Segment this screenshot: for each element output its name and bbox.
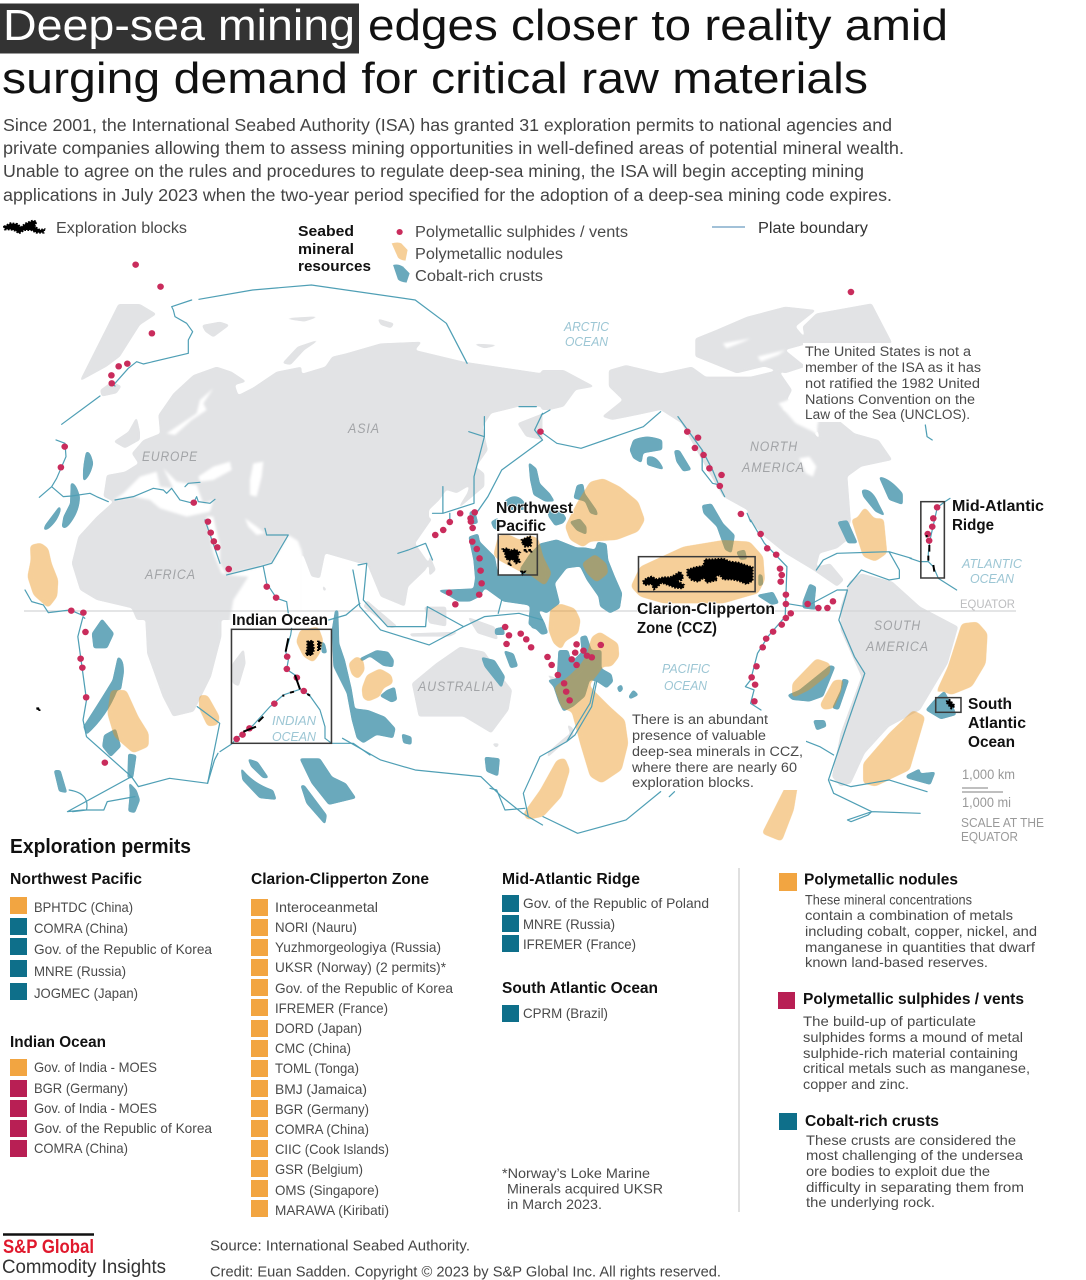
panel: Indian Ocean: BGR (Germany) — [34, 1080, 128, 1096]
panel: polymetallic sulphides: sulphide-rich material containing — [803, 1045, 1018, 1061]
intro text: private companies allowing them to assess mining opportunities in well-defined areas of potential mineral wealth. — [3, 138, 904, 158]
ocean labels: OCEAN — [970, 571, 1015, 586]
region labels: Mid-Atlantic — [952, 498, 1044, 515]
panel: Mid-Atlantic Ridge: Mid-Atlantic Ridge — [502, 871, 640, 888]
map legend: Polymetallic sulphides / vents — [415, 224, 628, 241]
callout: CCZ — [631, 712, 803, 790]
panel: South Atlantic Ocean — [502, 980, 658, 1022]
callout: CCZ: presence of valuable — [632, 728, 766, 743]
panel: cobalt-rich crusts: the underlying rock. — [806, 1194, 935, 1210]
sulphide and vent dots — [58, 261, 940, 766]
intro text: Unable to agree on the rules and procedures to regulate deep-sea mining, the ISA will begin accepting mining — [3, 161, 864, 181]
region labels: Northwest — [496, 500, 574, 517]
panel: polymetallic sulphides: sulphides forms a mound of metal — [803, 1029, 1023, 1045]
panel: Indian Ocean: Indian Ocean — [10, 1034, 106, 1051]
callout: CCZ: exploration blocks. — [632, 775, 754, 790]
map legend: resources — [298, 259, 371, 275]
icon: exploration blocks — [4, 221, 44, 233]
panel: Indian Ocean: COMRA (China) — [34, 1140, 128, 1156]
panel: Clarion-Clipperton Zone: MARAWA (Kiribati) — [275, 1202, 389, 1218]
callout: CCZ: deep-sea minerals in CCZ, — [632, 744, 803, 759]
panel: polymetallic nodules: including cobalt, copper, nickel, and — [805, 923, 1037, 939]
panel: Northwest Pacific — [10, 871, 212, 1001]
panel: polymetallic sulphides: copper and zinc. — [803, 1076, 909, 1092]
panel: Clarion-Clipperton Zone: CIIC (Cook Islands) — [275, 1141, 389, 1157]
panel: Indian Ocean: Gov. of India - MOES — [34, 1059, 157, 1075]
panel: Clarion-Clipperton Zone: GSR (Belgium) — [275, 1161, 363, 1177]
footnote: Minerals acquired UKSR — [507, 1180, 663, 1196]
panel: polymetallic nodules: contain a combination of metals — [805, 907, 1013, 923]
callout: United States: The United States is not a — [805, 344, 972, 359]
panel: cobalt-rich crusts: Cobalt-rich crusts — [805, 1113, 939, 1130]
footnote — [502, 1165, 663, 1212]
title — [0, 1, 948, 103]
scale bar: EQUATOR — [961, 830, 1018, 844]
panel: Indian Ocean — [10, 1034, 212, 1157]
panel: Mid-Atlantic Ridge: Gov. of the Republic of Poland — [523, 895, 709, 911]
panel: Clarion-Clipperton Zone: TOML (Tonga) — [275, 1060, 359, 1076]
scale bar: SCALE AT THE — [961, 816, 1044, 830]
continent labels: ASIA — [347, 421, 380, 436]
continent labels: AMERICA — [741, 460, 805, 475]
ocean labels: INDIAN — [272, 713, 317, 728]
region labels — [232, 498, 1044, 751]
ocean labels: PACIFIC — [662, 661, 711, 676]
panel: cobalt-rich crusts: difficulty in separating them from — [806, 1179, 1024, 1195]
panel: Clarion-Clipperton Zone: IFREMER (France) — [275, 1000, 388, 1016]
source and credit: Source: International Seabed Authority. — [210, 1238, 470, 1254]
panel: Clarion-Clipperton Zone: BMJ (Jamaica) — [275, 1081, 367, 1097]
panel: cobalt-rich crusts: These crusts are considered the — [806, 1132, 1016, 1148]
panel: Mid-Atlantic Ridge: IFREMER (France) — [523, 936, 636, 952]
panel: Northwest Pacific: MNRE (Russia) — [34, 963, 126, 979]
map legend: Exploration blocks — [56, 220, 187, 237]
intro text: Since 2001, the International Seabed Authority (ISA) has granted 31 exploration permits to national agencies and — [3, 115, 892, 135]
heading: exploration permits: Exploration permits — [10, 836, 191, 858]
icons: resources key — [392, 229, 410, 283]
panel: Clarion-Clipperton Zone — [251, 871, 453, 1218]
logo — [2, 1234, 166, 1278]
scale bar: 1,000 mi — [962, 795, 1011, 810]
continent labels — [142, 421, 929, 694]
map legend: mineral — [298, 242, 354, 258]
ocean labels: OCEAN — [272, 729, 317, 744]
panel: Northwest Pacific: Northwest Pacific — [10, 871, 142, 888]
region labels: Ocean — [968, 734, 1015, 751]
region labels: Zone (CCZ) — [637, 620, 717, 637]
panel: Clarion-Clipperton Zone: DORD (Japan) — [275, 1020, 362, 1036]
continent labels: AFRICA — [144, 567, 196, 582]
callout: CCZ: where there are nearly 60 — [631, 760, 797, 775]
panel: cobalt-rich crusts: most challenging of the undersea — [806, 1147, 1023, 1163]
ocean labels: OCEAN — [565, 334, 609, 349]
panel: cobalt-rich crusts: ore bodies to exploit due the — [806, 1163, 990, 1179]
panel: Clarion-Clipperton Zone: UKSR (Norway) (2 permits)* — [275, 959, 447, 975]
footnote: *Norway’s Loke Marine — [502, 1165, 650, 1181]
callout: United States: member of the ISA as it has — [805, 360, 981, 375]
intro text — [3, 115, 904, 205]
panel: Indian Ocean: Gov. of the Republic of Korea — [34, 1120, 212, 1136]
exploration blocks — [37, 535, 955, 732]
continent labels: NORTH — [750, 439, 798, 454]
panel: Northwest Pacific: COMRA (China) — [34, 920, 128, 936]
continent labels: EUROPE — [142, 449, 198, 464]
continent labels: AUSTRALIA — [417, 679, 495, 694]
panel: Indian Ocean: Gov. of India - MOES — [34, 1100, 157, 1116]
panel: South Atlantic Ocean: CPRM (Brazil) — [523, 1005, 608, 1021]
panel: polymetallic sulphides: Polymetallic sulphides / vents — [803, 991, 1024, 1008]
region labels: South — [968, 696, 1012, 713]
ocean labels: ATLANTIC — [961, 556, 1023, 571]
plate boundaries — [25, 285, 957, 833]
logo: Commodity Insights — [2, 1256, 166, 1278]
panel: South Atlantic Ocean: South Atlantic Ocean — [502, 980, 658, 997]
panel: polymetallic sulphides: The build-up of particulate — [803, 1013, 976, 1029]
world map — [24, 261, 1044, 844]
continent labels: AMERICA — [865, 639, 929, 654]
title: edges closer to reality amid — [368, 1, 948, 50]
panel: Clarion-Clipperton Zone: Gov. of the Republic of Korea — [275, 980, 453, 996]
region labels: Clarion-Clipperton — [637, 601, 775, 618]
region labels: Indian Ocean — [232, 612, 328, 629]
map legend: Cobalt-rich crusts — [415, 268, 543, 285]
callout: United States — [805, 344, 981, 422]
map legend: Plate boundary — [758, 220, 868, 237]
intro text: applications in July 2023 when the two-year period specified for the adoption of a deep-sea mining code expires. — [3, 185, 892, 205]
ocean labels — [272, 319, 1023, 744]
polymetallic nodules — [27, 478, 988, 842]
title: Deep-sea mining — [3, 1, 355, 50]
panel: Clarion-Clipperton Zone: Interoceanmetal — [275, 899, 378, 915]
map legend — [4, 220, 868, 285]
ocean labels: OCEAN — [664, 678, 708, 693]
title: surging demand for critical raw materials — [2, 54, 868, 103]
scale bar: 1,000 km — [962, 767, 1015, 782]
panel: Mid-Atlantic Ridge — [502, 871, 709, 952]
panel: Clarion-Clipperton Zone: OMS (Singapore) — [275, 1182, 379, 1198]
region labels: Atlantic — [968, 715, 1026, 732]
land masses — [72, 303, 958, 787]
panel: Clarion-Clipperton Zone: Yuzhmorgeologiya (Russia) — [275, 939, 441, 955]
callout: CCZ: There is an abundant — [632, 712, 768, 727]
region labels: Pacific — [496, 518, 546, 535]
panel: Clarion-Clipperton Zone: COMRA (China) — [275, 1121, 369, 1137]
panel: polymetallic nodules: These mineral concentrations — [805, 892, 972, 908]
panel: polymetallic nodules — [779, 872, 1037, 970]
panel: Northwest Pacific: JOGMEC (Japan) — [34, 985, 138, 1001]
map legend: Seabed — [298, 224, 354, 240]
panel: polymetallic nodules: Polymetallic nodules — [804, 872, 958, 888]
scale bar — [961, 767, 1044, 844]
callout: United States: Law of the Sea (UNCLOS). — [805, 407, 970, 422]
panel: Clarion-Clipperton Zone: CMC (China) — [275, 1040, 351, 1056]
ocean labels: ARCTIC — [563, 319, 610, 334]
callout: United States: Nations Convention on the — [805, 392, 975, 407]
panel: Clarion-Clipperton Zone: Clarion-Clipperton Zone — [251, 871, 429, 888]
source and credit — [210, 1238, 721, 1280]
equator line — [24, 610, 1016, 612]
panel: Clarion-Clipperton Zone: BGR (Germany) — [275, 1101, 369, 1117]
panel: polymetallic sulphides: critical metals such as manganese, — [803, 1060, 1030, 1076]
callout: United States: not ratified the 1982 United — [805, 376, 980, 391]
footnote: in March 2023. — [507, 1196, 602, 1212]
region boxes — [231, 502, 961, 743]
region labels: Ridge — [952, 517, 994, 534]
panel: Northwest Pacific: BPHTDC (China) — [34, 899, 133, 915]
cobalt-rich crusts — [43, 437, 956, 825]
ocean labels: EQUATOR — [960, 597, 1015, 611]
logo: S&P Global — [3, 1237, 94, 1258]
panel: polymetallic nodules: manganese in quantities that dwarf — [805, 939, 1035, 955]
panel: polymetallic nodules: known land-based reserves. — [805, 954, 988, 970]
panel: Mid-Atlantic Ridge: MNRE (Russia) — [523, 916, 615, 932]
panel: polymetallic sulphides — [778, 991, 1030, 1092]
note backgrounds — [630, 343, 985, 790]
panel: Northwest Pacific: Gov. of the Republic of Korea — [34, 941, 212, 957]
panel: cobalt-rich crusts — [779, 1113, 1024, 1210]
map legend: Polymetallic nodules — [415, 246, 563, 263]
continent labels: SOUTH — [874, 618, 921, 633]
panel: Clarion-Clipperton Zone: NORI (Nauru) — [275, 919, 357, 935]
